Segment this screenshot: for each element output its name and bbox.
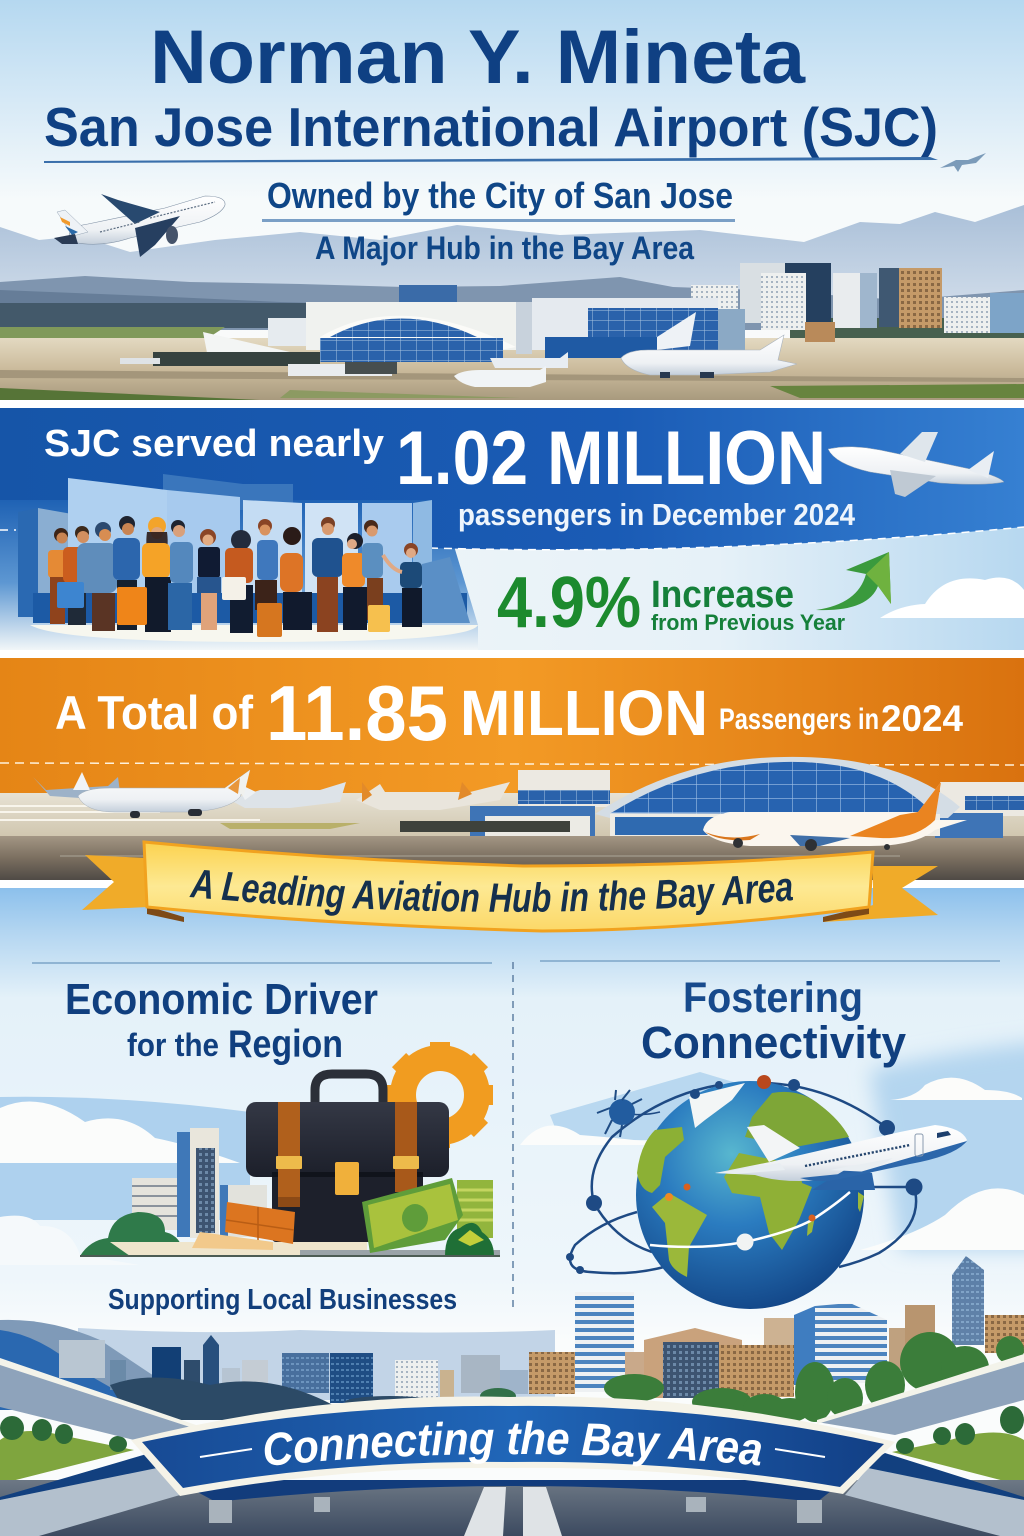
illustration: crowd of travellers: [48, 516, 422, 637]
title underline with small plane icon: [44, 153, 986, 172]
panel: fostering connectivity: [540, 960, 1000, 1309]
illustration: terminal glass frame: [18, 474, 478, 642]
illustration: globe: [636, 1081, 864, 1309]
panel: bottom city and banner: [0, 1256, 1024, 1536]
panel: December 2024 passengers: [0, 408, 1024, 650]
icon: green up arrow: [816, 552, 891, 610]
statistic: annual total: MILLION: [460, 677, 708, 749]
illustration: back flight routes: [570, 1083, 916, 1273]
heading: fostering connectivity: [641, 974, 906, 1068]
illustration: base and bushes: [80, 1212, 500, 1256]
divider between panels: [512, 962, 514, 1312]
illustration: side grass and roads: [0, 1354, 1024, 1486]
illustration: city buildings: [132, 1128, 267, 1238]
subtitle: hub: A Major Hub in the Bay Area: [315, 230, 694, 266]
illustration: left skyline: [59, 1335, 528, 1403]
ribbon: leading aviation hub: A Leading Aviation Hub in the Bay Area: [189, 870, 793, 916]
illustration: orange-tailed plane: [703, 782, 967, 851]
caption: supporting local businesses: Supporting Local Businesses: [108, 1284, 457, 1316]
icon: money stack: [80, 1178, 500, 1257]
heading: economic driver: Region: [228, 1023, 343, 1066]
illustration: planes on apron: [33, 770, 570, 832]
icon: satellite: [597, 1090, 642, 1137]
title: [44, 15, 938, 158]
heading: economic driver: Economic Driver: [65, 975, 378, 1024]
illustration: distant hills: [0, 1320, 555, 1410]
panel: lower sky section: [0, 888, 1024, 1536]
illustration: downtown skyline: [691, 263, 1024, 350]
heading: economic driver: [65, 975, 378, 1066]
statistic: annual total: 2024: [881, 698, 963, 739]
illustration: terminal building: [203, 285, 718, 362]
subtitle underline: [262, 219, 735, 222]
panel: economic driver: [32, 962, 500, 1316]
statistic: annual total: [55, 669, 963, 757]
illustration: clouds: [880, 578, 1024, 618]
illustration: runway: [0, 1453, 1024, 1536]
title: San Jose International Airport (SJC): [44, 96, 938, 158]
illustration: apron: [0, 793, 1024, 880]
panel: annual passenger total: [0, 658, 1024, 880]
illustration: parked aircraft and ground vehicles: [120, 335, 797, 387]
heading: fostering connectivity: Fostering: [683, 974, 863, 1022]
traveller figures: [48, 516, 422, 633]
heading: fostering connectivity: Connectivity: [641, 1017, 906, 1068]
statistic: growth: 4.9%: [497, 563, 641, 643]
statistic: growth: from Previous Year: [651, 610, 845, 635]
illustration: right skyline: [529, 1256, 1024, 1398]
banner: connecting the bay area: [131, 1396, 895, 1496]
statistic: annual total: A Total of: [55, 686, 253, 739]
subtitle: owner: Owned by the City of San Jose: [267, 175, 733, 216]
illustration: plane in flight: [54, 194, 225, 257]
title: Norman Y. Mineta: [150, 15, 806, 100]
shopping bags: [57, 577, 390, 637]
statistic: growth: [497, 563, 845, 643]
illustration: tree line and grass: [0, 303, 1024, 364]
illustration: mountains: [0, 205, 1024, 330]
ribbon: leading aviation hub: [82, 840, 938, 932]
illustration: airliner over globe: [715, 1125, 967, 1190]
statistic: growth: Increase: [651, 574, 794, 616]
illustration: stacked boxes: [192, 1202, 295, 1250]
panel: header with airport scene: [0, 0, 1024, 400]
illustration: terminal with glass arch: [470, 757, 1024, 838]
illustration: front flight route and markers: [566, 1075, 922, 1274]
banner: connecting the bay area: Connecting the Bay Area: [264, 1420, 761, 1466]
illustration: trees: [110, 1332, 1024, 1422]
illustration: plane over blue band: [828, 432, 1004, 497]
statistic: passengers in December: SJC served nearly: [44, 423, 384, 465]
icon: orange gear: [387, 1042, 493, 1148]
statistic: passengers in December: 1.02 MILLION: [396, 416, 826, 501]
heading: economic driver: for the: [127, 1027, 219, 1063]
statistic: annual total: Passengers in: [719, 703, 879, 736]
statistic: annual total: 11.85: [266, 669, 448, 757]
illustration: apron and runway: [0, 338, 1024, 400]
statistic: passengers in December: [44, 416, 856, 532]
icon: briefcase: [246, 1074, 449, 1242]
statistic: passengers in December: passengers in December 2024: [458, 497, 856, 532]
illustration: sky bands and clouds: [0, 1040, 1024, 1265]
